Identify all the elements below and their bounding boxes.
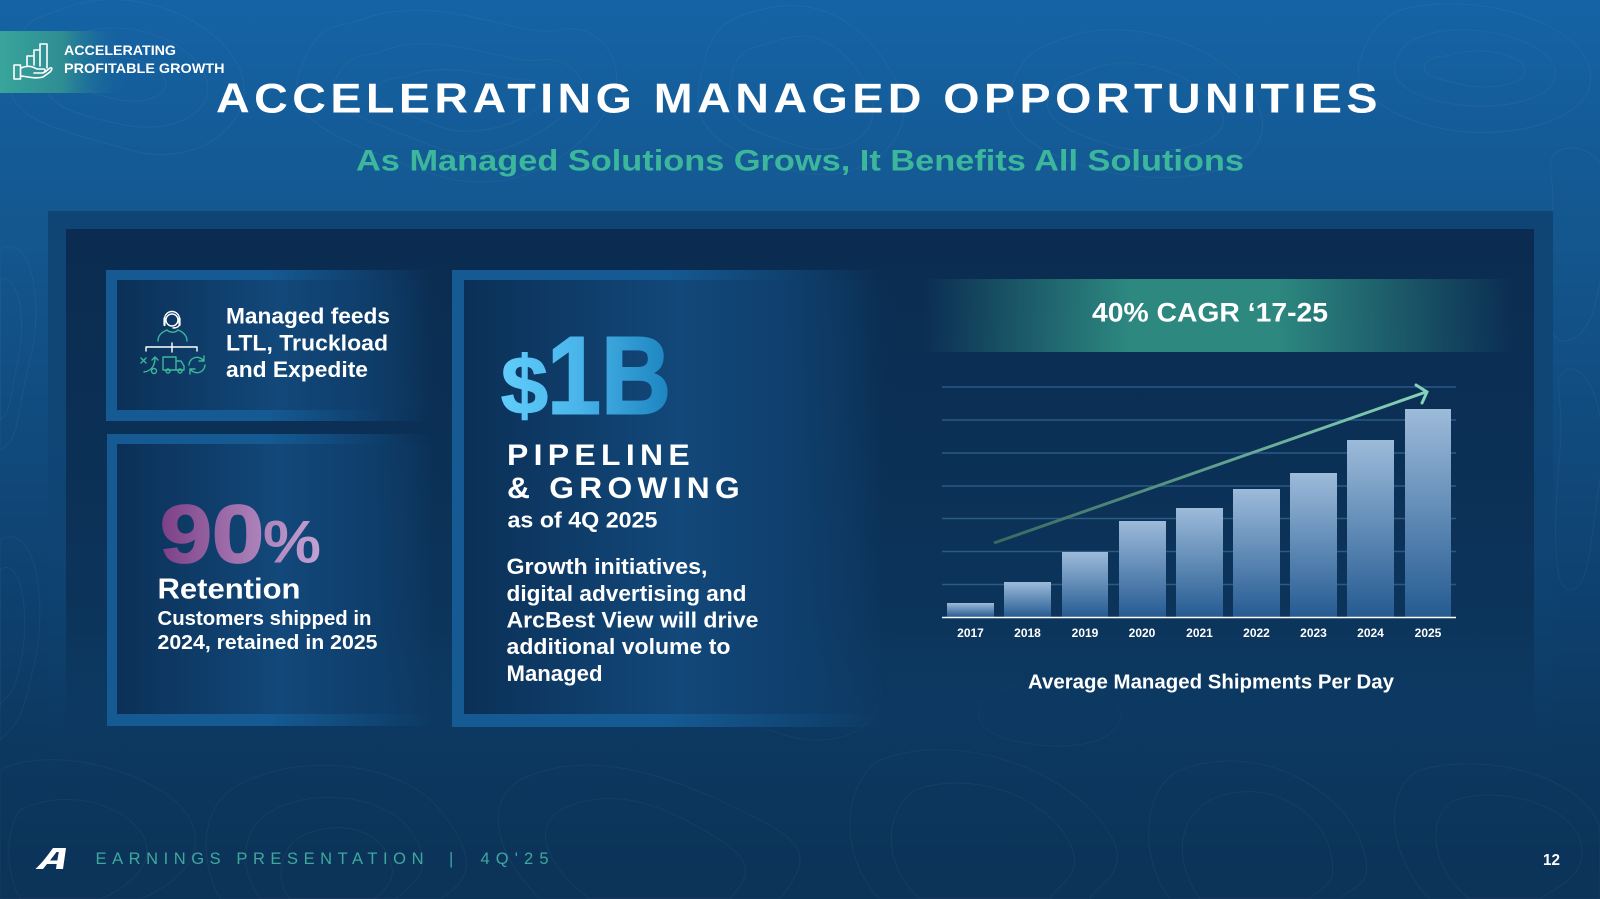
year labels: 2018: [1014, 626, 1041, 640]
footer label: |: [449, 850, 453, 868]
section tag: [0, 31, 224, 93]
text: growth initiatives: digital advertising and: [506, 581, 746, 606]
year labels: 2019: [1072, 626, 1099, 640]
arrow: growth trend: [994, 385, 1427, 543]
chart caption: Average Managed Shipments Per Day: [1028, 672, 1395, 694]
year labels: 2020: [1129, 626, 1156, 640]
text: managed feeds: [226, 304, 390, 382]
callout: CAGR band: 40% CAGR ‘17-25: [1092, 298, 1328, 328]
text: retention detail: [158, 608, 378, 654]
icon: hand holding bar chart: [14, 44, 52, 79]
year labels: 2025: [1415, 626, 1442, 640]
stat: 90 percent: 90: [160, 489, 264, 580]
section tag label: PROFITABLE GROWTH: [64, 60, 224, 76]
stat: one billion dollars: $: [501, 340, 548, 432]
stat: one billion dollars: 1B: [547, 314, 671, 438]
icon: agent with service modes: [141, 312, 205, 374]
inner panel: [66, 229, 1534, 764]
text: growth initiatives: Growth initiatives,: [506, 554, 708, 579]
year labels: 2024: [1357, 626, 1384, 640]
title: ACCELERATING MANAGED OPPORTUNITIES: [216, 74, 1382, 122]
year labels: 2017: [957, 626, 984, 640]
panel: pipeline: [452, 270, 894, 727]
bars: [947, 409, 1451, 617]
text: managed feeds: Managed feeds: [226, 304, 390, 328]
year labels: 2022: [1243, 626, 1270, 640]
icon: logo: [36, 848, 66, 869]
callout: CAGR band: [923, 279, 1513, 352]
heading: pipeline and growing: PIPELINE: [507, 439, 695, 472]
panel: retention: [107, 434, 442, 726]
bar chart: [942, 385, 1456, 640]
text: growth initiatives: ArcBest View will drive: [506, 608, 758, 632]
stat: 90 percent: %: [263, 508, 321, 576]
label: retention: Retention: [158, 574, 300, 606]
footer: [36, 848, 548, 869]
footer label: 4Q'25: [480, 850, 548, 868]
heading: pipeline and growing: & GROWING: [507, 472, 745, 505]
text: retention detail: Customers shipped in: [158, 608, 372, 630]
outer panel: [48, 211, 1553, 771]
footer label: EARNINGS PRESENTATION: [96, 850, 424, 868]
stat: 90 percent: [160, 489, 321, 580]
text: managed feeds: and Expedite: [226, 357, 368, 382]
year labels: 2021: [1186, 626, 1213, 640]
page number: 12: [1543, 852, 1560, 869]
heading: pipeline and growing: [507, 439, 745, 505]
text: growth initiatives: [506, 554, 758, 686]
text: growth initiatives: Managed: [506, 661, 602, 686]
year labels: [957, 626, 1442, 640]
section tag label: ACCELERATING: [64, 42, 176, 58]
year labels: 2023: [1300, 626, 1327, 640]
section tag label: [64, 42, 224, 76]
text: growth initiatives: additional volume to: [506, 634, 730, 659]
panel: managed feeds: [106, 270, 437, 421]
text: retention detail: 2024, retained in 2025: [158, 632, 378, 654]
stat: one billion dollars: [501, 314, 671, 438]
note: as of date: as of 4Q 2025: [508, 508, 658, 532]
subtitle: As Managed Solutions Grows, It Benefits All Solutions: [356, 144, 1244, 178]
text: managed feeds: LTL, Truckload: [226, 330, 388, 356]
